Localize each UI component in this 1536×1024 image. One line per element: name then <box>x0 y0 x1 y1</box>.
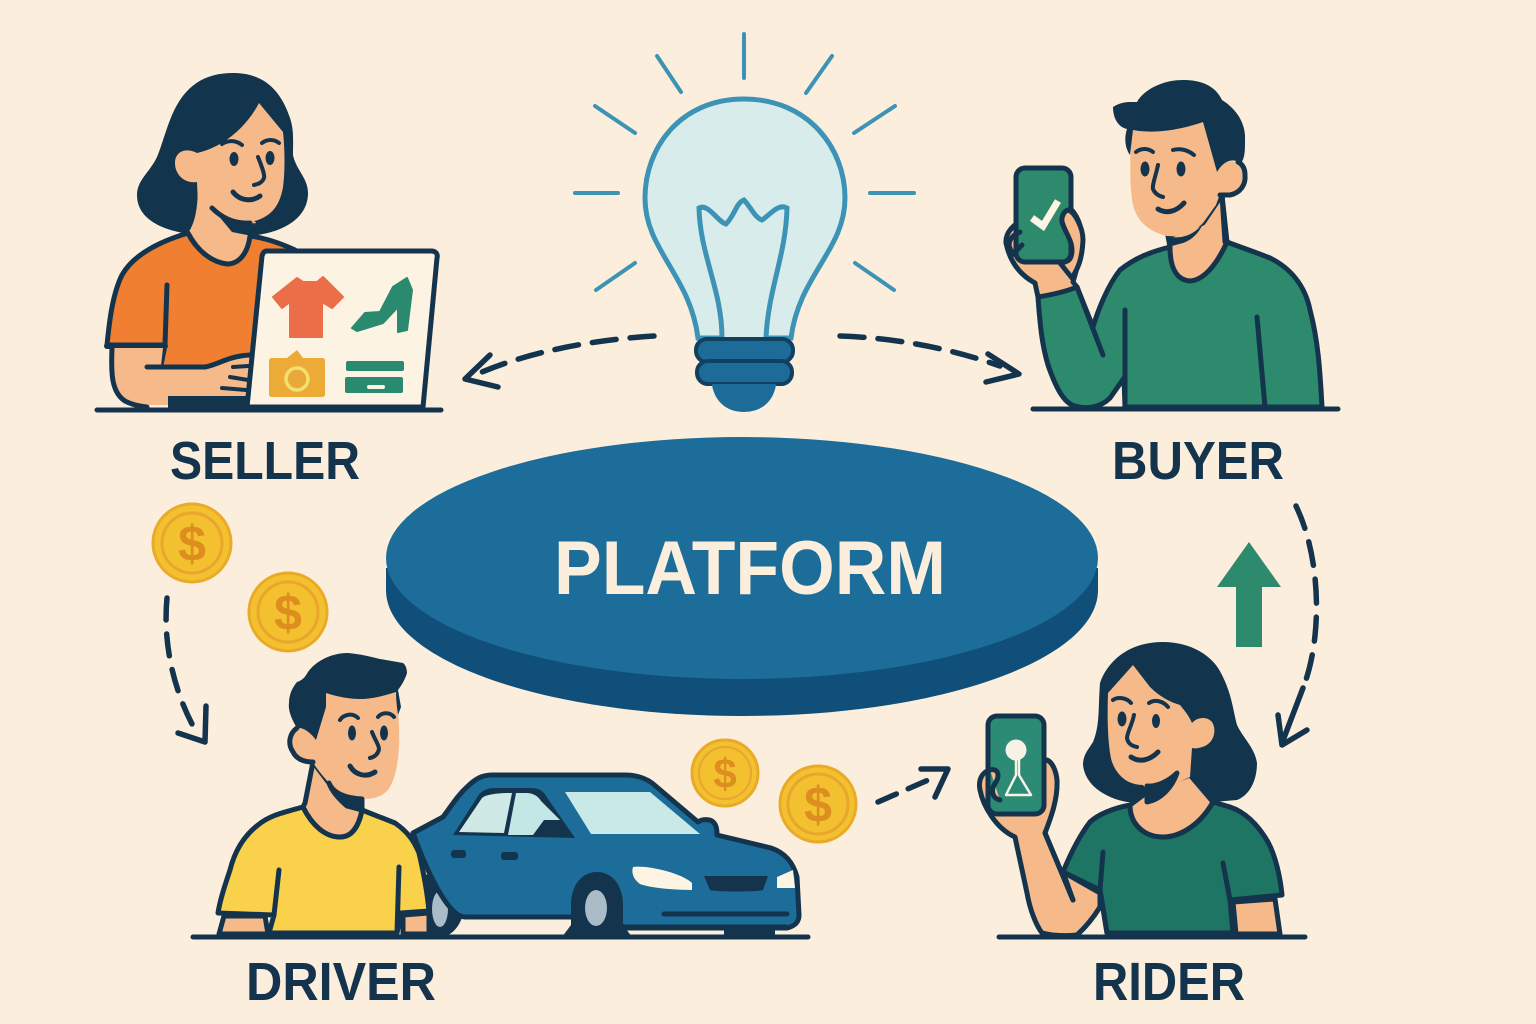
character: driver <box>218 653 429 934</box>
arrow: buyer to rider <box>1278 506 1316 745</box>
buyer hair <box>1113 80 1245 172</box>
ground line: buyer <box>1033 406 1338 412</box>
seller shirt <box>107 233 295 370</box>
driver shirt <box>218 807 429 933</box>
car windows <box>453 788 575 838</box>
rider hair <box>1083 642 1257 802</box>
platform label: PLATFORM <box>554 526 946 611</box>
character: buyer <box>1006 80 1322 408</box>
coins: car to rider <box>692 740 856 842</box>
car <box>410 775 799 938</box>
label: buyer: BUYER <box>1112 431 1284 491</box>
seller arm <box>112 348 250 405</box>
ground line: driver <box>193 934 808 940</box>
rider neck <box>1130 775 1213 837</box>
arrow: bulb to buyer <box>840 336 1019 382</box>
arrow: coins to driver <box>166 598 206 742</box>
label: seller: SELLER <box>170 431 360 491</box>
buyer hand <box>1006 208 1082 297</box>
arrow: coins to rider <box>878 769 948 802</box>
coins: seller to driver: $ <box>274 585 302 641</box>
rider shirt <box>1063 802 1282 933</box>
icon: shirt <box>273 277 343 337</box>
seller laptop <box>247 251 437 407</box>
rider face <box>1108 665 1214 795</box>
car front wheel <box>562 872 632 937</box>
icon: light bulb <box>575 34 914 411</box>
icon: camera <box>269 350 325 397</box>
arrow: bulb to seller <box>465 336 654 387</box>
buyer sweater <box>1038 242 1322 408</box>
driver hair <box>289 653 407 740</box>
character: seller <box>107 73 437 409</box>
label: rider: RIDER <box>1093 952 1245 1012</box>
icon: phone with person <box>988 716 1044 814</box>
car rear wheel <box>410 872 464 938</box>
character: rider <box>979 642 1282 936</box>
platform ellipse <box>386 437 1098 716</box>
icon: phone with check <box>1016 168 1071 262</box>
rider arm and hand <box>979 760 1100 936</box>
arrow: green up <box>1217 542 1281 647</box>
buyer face <box>1130 122 1244 236</box>
ground line: seller <box>97 408 441 412</box>
icon: wallet card <box>345 361 404 393</box>
coins: car to rider: $ <box>804 777 832 833</box>
coins: car to rider: $ <box>713 750 737 797</box>
car front right wheel <box>724 925 775 936</box>
ground line: rider <box>999 934 1305 940</box>
car body <box>413 775 799 928</box>
coins: seller to driver <box>153 504 327 651</box>
coins: seller to driver: $ <box>178 516 206 572</box>
driver neck and face <box>303 762 362 837</box>
label: driver: DRIVER <box>246 952 436 1012</box>
icon: high heel <box>352 278 412 332</box>
